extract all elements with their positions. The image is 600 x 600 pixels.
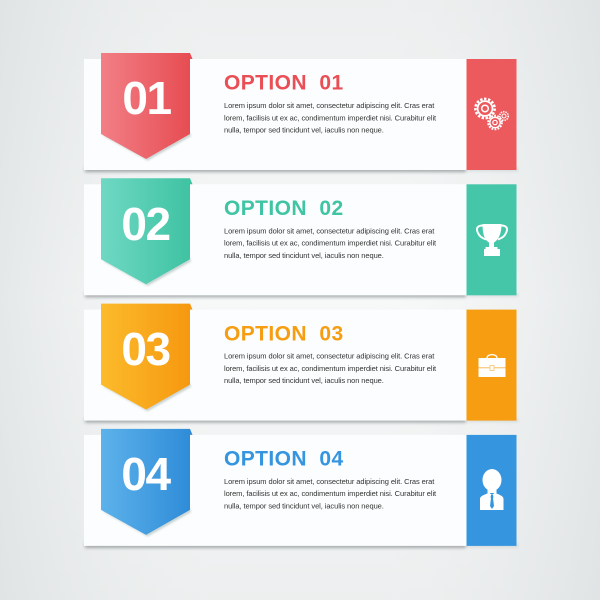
text block 01: lorem, facilisis ut ex ac, condimentum imperdiet nisi. Curabitur elit: [224, 113, 437, 122]
text block 03: Lorem ipsum dolor sit amet, consectetur adipiscing elit. Cras erat: [224, 352, 435, 361]
number 04: 04: [121, 448, 171, 500]
ribbon 04: [101, 429, 192, 536]
heading 02: OPTION 02: [224, 197, 344, 220]
text block 03: lorem, facilisis ut ex ac, condimentum imperdiet nisi. Curabitur elit: [224, 364, 437, 373]
text block 04: nulla, tempor sed tincidunt vel, iaculis non neque.: [224, 501, 384, 510]
text block 01: Lorem ipsum dolor sit amet, consectetur adipiscing elit. Cras erat: [224, 101, 435, 110]
text block 03: [224, 352, 437, 385]
ribbon 03: [101, 304, 192, 411]
text block 04: lorem, facilisis ut ex ac, condimentum imperdiet nisi. Curabitur elit: [224, 489, 437, 498]
heading 01: OPTION 01: [224, 72, 344, 95]
text block 02: Lorem ipsum dolor sit amet, consectetur adipiscing elit. Cras erat: [224, 226, 435, 235]
panel: option 04: [84, 429, 518, 548]
text block 02: [224, 226, 437, 260]
number 01: 01: [122, 72, 171, 124]
side tab 04: [466, 435, 516, 546]
side tab 02: [466, 184, 516, 295]
text block 03: nulla, tempor sed tincidunt vel, iaculis non neque.: [224, 376, 384, 385]
panel: option 03: [84, 304, 518, 423]
icon: trophy: [477, 224, 507, 256]
panel: option 02: [84, 178, 518, 297]
panel: option 01: [84, 53, 518, 172]
side tab 01: [466, 59, 516, 170]
number 03: 03: [121, 323, 170, 375]
ribbon 02: [101, 178, 192, 286]
icon: gears: [475, 99, 508, 129]
side tab 03: [466, 310, 516, 421]
number 02: 02: [121, 198, 170, 250]
text block 02: nulla, tempor sed tincidunt vel, iaculis non neque.: [224, 251, 384, 260]
heading 03: OPTION 03: [224, 322, 344, 345]
text block 02: lorem, facilisis ut ex ac, condimentum imperdiet nisi. Curabitur elit: [224, 239, 437, 248]
ribbon 01: [101, 53, 192, 160]
text block 04: Lorem ipsum dolor sit amet, consectetur adipiscing elit. Cras erat: [224, 477, 435, 486]
heading 04: OPTION 04: [224, 448, 344, 471]
text block 01: nulla, tempor sed tincidunt vel, iaculis non neque.: [224, 126, 384, 134]
icon: briefcase: [478, 355, 506, 377]
text block 04: [224, 477, 437, 510]
icon: businessman: [480, 469, 504, 510]
text block 01: [224, 101, 437, 134]
